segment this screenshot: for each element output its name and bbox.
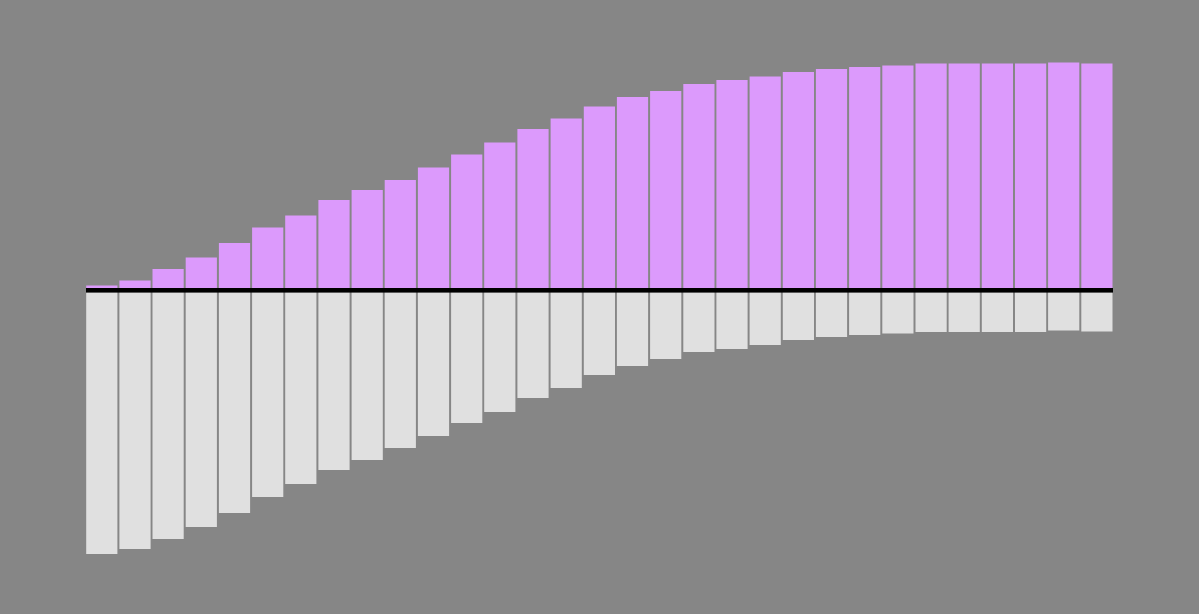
upper purple bars bbox=[86, 62, 1113, 290]
lower light grey bars bbox=[86, 291, 1113, 554]
black baseline axis bbox=[86, 288, 1113, 293]
